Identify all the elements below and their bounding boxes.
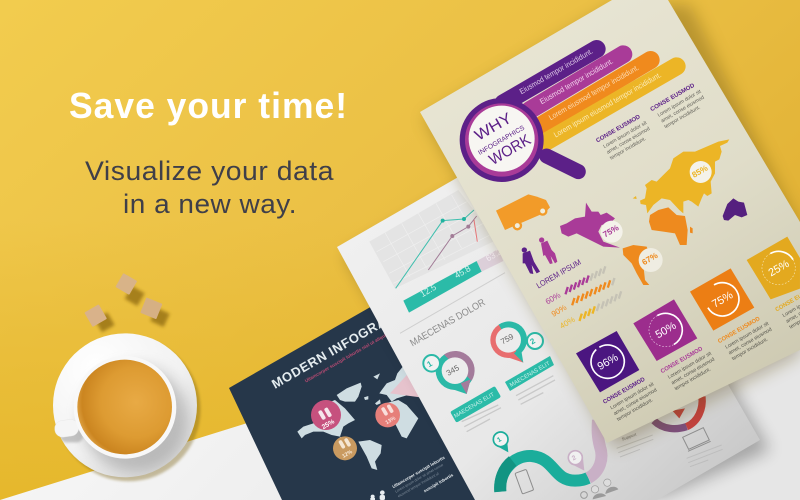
label: Maecenas elit right bbox=[505, 356, 554, 391]
stripe label 4: Lorem ipsum eiusmod tempor incididunt. bbox=[552, 70, 663, 139]
coffee cup and sugar bbox=[53, 273, 201, 481]
tile: 96%: 96% bbox=[595, 351, 621, 373]
map: Eurasia bbox=[633, 139, 729, 213]
marker: 67%: 67% bbox=[640, 250, 660, 267]
pin 1: 1 bbox=[496, 436, 503, 444]
pin 2: 2 bbox=[571, 454, 578, 462]
tile text: magenta: CONSE EUSMOD bbox=[660, 346, 705, 375]
tile text: purple bbox=[602, 374, 662, 424]
tile: 50%: 50% bbox=[653, 320, 679, 341]
dark sheet text block: Ullamcorper suscipit lobortis bbox=[391, 455, 446, 489]
section heading: Maecenas dolor: MAECENAS DOLOR bbox=[408, 297, 487, 349]
line chart bbox=[369, 190, 497, 288]
caption lines bbox=[617, 435, 723, 467]
text block: conse eusmod 2 bbox=[650, 81, 710, 132]
value bar: 45.8 bbox=[453, 263, 472, 280]
tile text: orange bbox=[717, 313, 777, 364]
callout stripes bbox=[503, 49, 677, 141]
cup bbox=[74, 356, 176, 459]
subheading bbox=[85, 156, 334, 219]
tile: 75%: 75% bbox=[710, 289, 735, 311]
map: North America bbox=[560, 203, 620, 248]
map marker: 25%: 25% bbox=[321, 418, 336, 431]
pin 2 bbox=[568, 451, 584, 471]
marker: 85%: 85% bbox=[690, 162, 710, 180]
text block: conse eusmod 2: amet, conse eiusmod bbox=[660, 95, 706, 124]
cream sheet shadow bbox=[424, 4, 800, 450]
donut chart bbox=[654, 397, 702, 429]
magnifier lens: WORK bbox=[486, 131, 535, 169]
tile text: magenta: tempor incididunt. bbox=[674, 367, 712, 392]
cream infographic sheet bbox=[420, 0, 800, 443]
tile text: purple: Lorem ipsum dolor sit bbox=[609, 381, 656, 411]
white infographic sheet bbox=[337, 112, 760, 500]
stripe label 3: Lorem eiusmod tempor incididunt. bbox=[547, 63, 641, 122]
marker: 75%: 75% bbox=[601, 222, 621, 239]
dark sheet text block: suscipit lobortis bbox=[423, 472, 455, 493]
dark sheet subtitle: Ullamcorper suscipit lobortis nisl ut aliquip ex ea bbox=[304, 325, 401, 384]
tile text: magenta: Lorem ipsum dolor sit bbox=[667, 350, 713, 381]
icon: laptop bbox=[683, 428, 711, 451]
tile text: purple: CONSE EUSMOD bbox=[602, 377, 647, 406]
donut arrow bbox=[672, 408, 685, 418]
tile text: purple: tempor incididunt. bbox=[616, 397, 654, 423]
heading: Save your time: Save your time! bbox=[69, 85, 348, 126]
magnifier handle bbox=[547, 156, 578, 172]
cup handle bbox=[54, 418, 80, 438]
tile text: purple: amet, conse eiusmod bbox=[613, 387, 658, 417]
people icon bbox=[370, 490, 385, 500]
tile text: orange: Lorem ipsum dolor sit bbox=[724, 320, 771, 351]
pin 759: 759 bbox=[499, 332, 516, 346]
tile text: yellow bbox=[775, 282, 800, 332]
white infographic sheet shadow bbox=[345, 120, 770, 496]
pin 759: 2 bbox=[528, 336, 537, 346]
map: Africa bbox=[649, 207, 688, 245]
pink cone highlight bbox=[390, 373, 421, 397]
support heading: Support bbox=[621, 431, 638, 442]
lower yellow shading bbox=[0, 220, 400, 500]
tile: 75% bbox=[690, 268, 754, 331]
label: Lorem ipsum: LOREM IPSUM bbox=[535, 258, 583, 290]
dark infographic sheet bbox=[229, 290, 520, 500]
caption lines left bbox=[462, 405, 501, 432]
text block: conse eusmod 1: Lorem ipsum dolor sit bbox=[602, 120, 649, 150]
pin 759 bbox=[490, 321, 543, 363]
pin 345: 345 bbox=[445, 363, 461, 378]
sugar cubes bbox=[84, 273, 170, 332]
saucer bbox=[53, 333, 201, 481]
map: South America bbox=[623, 245, 650, 285]
icon: woman bbox=[539, 237, 557, 264]
pin 345 bbox=[423, 351, 475, 394]
label: Maecenas elit right: MAECENAS ELIT bbox=[509, 361, 552, 389]
tile text: magenta bbox=[660, 343, 720, 394]
text block: conse eusmod 1 bbox=[595, 113, 655, 163]
tile: 25% bbox=[747, 237, 800, 299]
process path bbox=[500, 420, 601, 492]
tile: 96% bbox=[576, 331, 639, 392]
text block: conse eusmod 2: tempor incididunt. bbox=[663, 105, 702, 130]
value bar: 63.2 bbox=[484, 246, 504, 263]
text block: conse eusmod 1: tempor incididunt. bbox=[609, 136, 647, 161]
icon: delivery truck bbox=[496, 194, 550, 230]
label caption lines right bbox=[516, 376, 555, 404]
text block: conse eusmod 2: Lorem ipsum dolor sit bbox=[657, 88, 703, 119]
label: Maecenas elit left: MAECENAS ELIT bbox=[453, 392, 496, 420]
pin 345: 1 bbox=[425, 359, 434, 369]
world map bbox=[297, 363, 421, 470]
magnifier lens: INFOGRAPHICS bbox=[477, 124, 526, 157]
map: Madagascar bbox=[690, 227, 693, 233]
dark sheet text block bbox=[391, 455, 456, 500]
marker: 67% bbox=[639, 248, 663, 272]
tile: 25%: 25% bbox=[766, 258, 792, 279]
value bar bbox=[403, 246, 504, 313]
white table surface bbox=[0, 251, 800, 500]
text block: conse eusmod 2: CONSE EUSMOD bbox=[650, 83, 697, 113]
text block: conse eusmod 1: amet, conse eiusmod bbox=[606, 126, 651, 156]
icon: people bbox=[581, 479, 618, 499]
icon: man bbox=[522, 247, 540, 274]
stripe label 1: Eiusmod tempor incididunt. bbox=[518, 47, 594, 96]
tile text: orange: amet, conse eiusmod bbox=[728, 327, 773, 356]
subheading: Visualize your data bbox=[85, 156, 334, 186]
stripe label 2: Eiusmod tempor incididunt. bbox=[538, 57, 615, 106]
magnifier lens: WHY bbox=[472, 110, 515, 144]
stat row 60%: 60% bbox=[544, 291, 562, 306]
subheading: in a new way. bbox=[123, 189, 297, 219]
stat row 90%: 90% bbox=[550, 303, 568, 319]
magnifier lens bbox=[460, 98, 544, 182]
dark sheet text block: eiusmod tempor incididunt ut bbox=[397, 472, 440, 498]
stat row 40%: 40% bbox=[558, 315, 577, 331]
map marker: 13%: 13% bbox=[385, 415, 397, 426]
map marker: 12%: 12% bbox=[341, 449, 354, 460]
pin 1 bbox=[493, 432, 508, 452]
value bar: 12.5 bbox=[418, 282, 438, 299]
tile text: magenta: amet, conse eiusmod bbox=[670, 357, 716, 386]
tile text: orange: tempor incididunt. bbox=[731, 337, 769, 362]
dark sheet title: MODERN INFOGRAPHICS bbox=[269, 292, 426, 392]
map: Australia bbox=[723, 198, 747, 221]
dark sheet text block: Lorem ipsum dolor sit amet conse bbox=[394, 463, 444, 494]
tile text: orange: CONSE EUSMOD bbox=[717, 316, 762, 345]
tile: 50% bbox=[633, 299, 697, 361]
icon: phone bbox=[515, 469, 534, 494]
text block: conse eusmod 1: CONSE EUSMOD bbox=[595, 114, 642, 144]
coffee bbox=[77, 360, 172, 454]
